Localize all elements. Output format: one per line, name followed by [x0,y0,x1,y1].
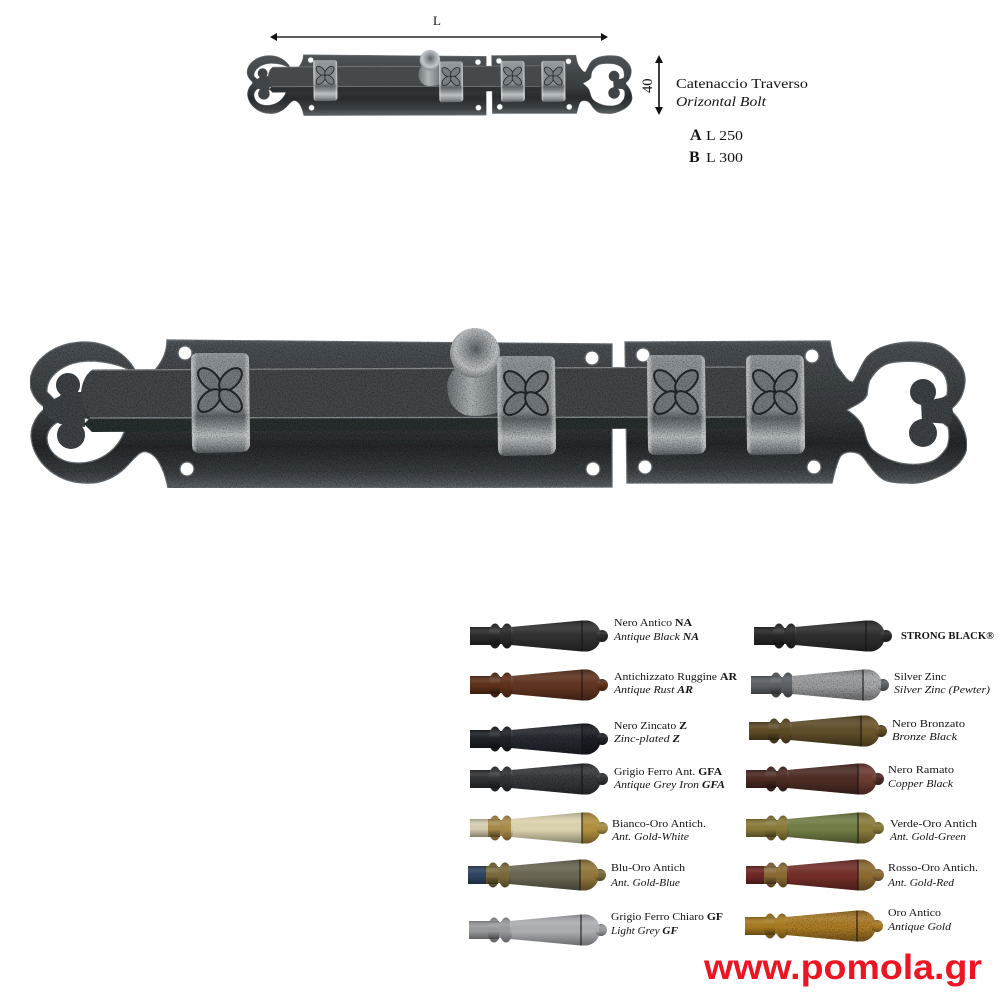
finish: Bianco-Oro: Ant. Gold-White [611,831,689,843]
finish: Grigio Ferro Antico: Antique Grey Iron GFA [613,779,725,791]
finish: Antichizzato Ruggine: Antique Rust AR [613,684,693,696]
finish: Oro Antico [745,907,952,942]
finish: Antichizzato Ruggine [470,670,738,700]
size list [689,127,743,166]
product title: Catenaccio Traverso [676,77,808,92]
finish swatches [468,617,994,946]
finish: Nero Bronzato: Nero Bronzato [892,718,966,730]
finish: Antichizzato Ruggine: Antichizzato Ruggine AR [614,671,738,683]
finish: Strong Black [754,620,994,652]
finish: Oro Antico: Oro Antico [888,907,942,919]
finish: Nero Zincato: Nero Zincato Z [614,720,687,732]
finish: Blu-Oro: Blu-Oro Antich [611,862,686,874]
finish: Silver Zinc [751,670,990,700]
finish: Nero Antico: Antique Black NA [613,631,699,643]
product title [676,77,808,110]
finish: Silver Zinc: Silver Zinc [894,671,946,683]
finish: Rosso-Oro: Ant. Gold-Red [887,877,955,889]
dimension arrow: length L: L [433,13,441,28]
finish: Nero Bronzato: Bronze Black [892,731,958,743]
finish: Grigio Ferro Antico [470,764,725,794]
finish: Verde-Oro [746,812,978,844]
finish: Grigio Ferro Chiaro: Grigio Ferro Chiaro GF [611,911,723,923]
size list: B [689,149,700,166]
finish: Nero Antico: Nero Antico NA [614,617,692,629]
finish: Grigio Ferro Antico: Grigio Ferro Ant. GFA [614,766,722,778]
finish: Nero Ramato: Nero Ramato [888,764,955,776]
finish: Grigio Ferro Chiaro: Light Grey GF [610,925,679,937]
finish: Oro Antico: Antique Gold [887,921,952,933]
finish: Rosso-Oro: Rosso-Oro Antich. [888,862,978,874]
finish: Nero Ramato [746,764,955,794]
finish: Bianco-Oro: Bianco-Oro Antich. [612,818,706,830]
finish: Verde-Oro: Ant. Gold-Green [889,831,967,843]
dimension arrow: height 40 [640,55,663,115]
finish: Nero Ramato: Copper Black [888,778,954,790]
finish: Rosso-Oro [746,860,978,890]
finish: Blu-Oro [468,860,686,890]
website address: www.pomola.gr [703,948,982,987]
finish: Grigio Ferro Chiaro [469,911,723,946]
dimension arrow: height 40: 40 [640,78,656,93]
finish: Nero Zincato [470,720,687,754]
finish: Nero Antico [470,617,699,652]
finish: Blu-Oro: Ant. Gold-Blue [610,877,680,889]
finish: Strong Black: STRONG BLACK® [901,630,994,642]
finish: Nero Zincato: Zinc-plated Z [614,733,680,745]
finish: Bianco-Oro [470,812,706,844]
small bolt technical view [247,50,632,116]
finish: Silver Zinc: Silver Zinc (Pewter) [894,684,990,696]
size list: A [690,127,702,144]
dimension arrow: length L [270,13,608,41]
finish: Verde-Oro: Verde-Oro Antich [890,818,978,830]
large bolt photo [30,328,967,488]
finish: Nero Bronzato [749,716,966,746]
size list: L 250 [706,128,743,143]
size list: L 300 [706,150,743,165]
product title: Orizontal Bolt [676,95,767,110]
